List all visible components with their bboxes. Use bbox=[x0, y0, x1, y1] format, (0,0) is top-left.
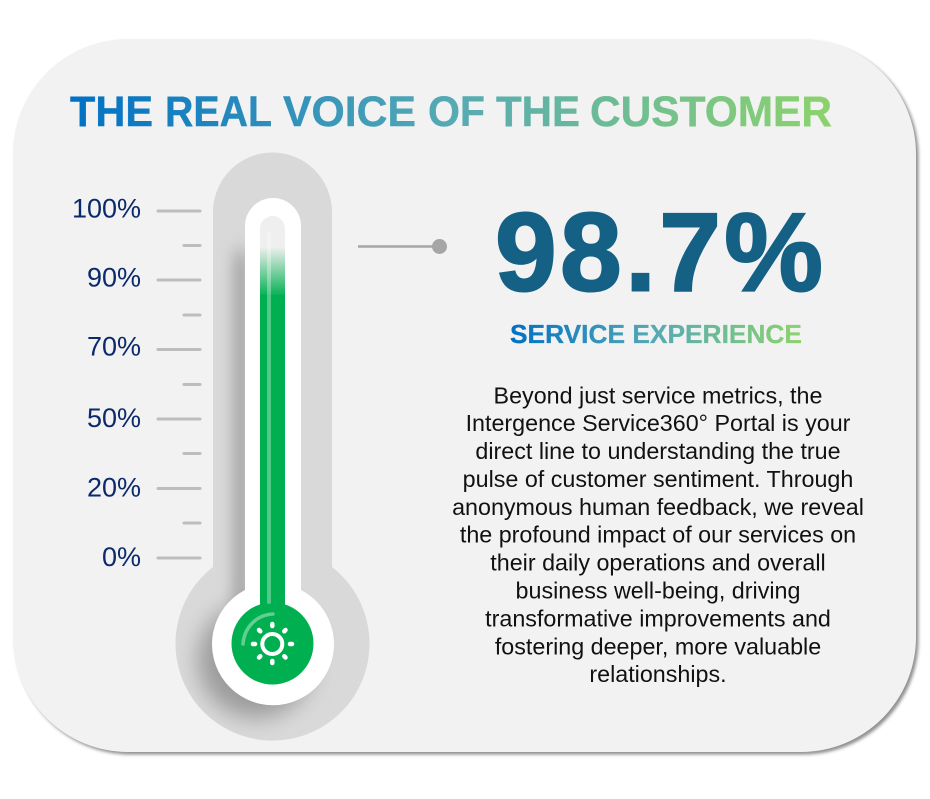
thermometer bbox=[176, 153, 370, 741]
thermometer scale labels: 90% bbox=[87, 262, 141, 292]
title: VOICE bbox=[283, 88, 416, 136]
body text: the profound impact of our services on bbox=[460, 522, 856, 548]
thermometer outer casing bbox=[176, 153, 370, 741]
thermometer scale labels: 20% bbox=[87, 472, 141, 502]
metric label: SERVICE EXPERIENCE bbox=[510, 319, 802, 349]
fading mercury level bbox=[260, 247, 285, 297]
body text: transformative improvements and bbox=[485, 605, 831, 631]
thermometer scale labels: 70% bbox=[87, 332, 141, 362]
pointer line bbox=[358, 239, 447, 254]
big metric value: 98.7% bbox=[495, 190, 823, 314]
bulb highlight bbox=[243, 614, 273, 644]
thermometer scale ticks bbox=[158, 211, 200, 558]
title: THE bbox=[496, 88, 580, 136]
tube highlight bbox=[267, 232, 271, 604]
thermometer scale labels: 100% bbox=[72, 194, 141, 224]
body text: Intergence Service360° Portal is your bbox=[466, 410, 851, 436]
title bbox=[70, 88, 832, 136]
inner shadows bbox=[198, 240, 314, 718]
thermometer scale labels: 0% bbox=[102, 542, 141, 572]
body text: fostering deeper, more valuable bbox=[495, 633, 821, 659]
body text bbox=[452, 382, 864, 687]
body text: their daily operations and overall bbox=[490, 550, 826, 576]
body text: relationships. bbox=[589, 661, 727, 687]
body text: pulse of customer sentiment. Through bbox=[463, 466, 853, 492]
title: CUSTOMER bbox=[590, 88, 832, 136]
thermometer scale labels bbox=[72, 194, 141, 572]
thermometer scale labels: 50% bbox=[87, 403, 141, 433]
body text: anonymous human feedback, we reveal bbox=[452, 494, 864, 520]
title: OF bbox=[428, 88, 485, 136]
solid mercury column bbox=[260, 295, 285, 615]
mercury bulb bbox=[232, 602, 314, 684]
title: THE bbox=[70, 88, 153, 136]
thermometer white glass bbox=[212, 198, 334, 705]
body text: direct line to understanding the true bbox=[475, 438, 841, 464]
body text: business well-being, driving bbox=[516, 578, 800, 604]
icon: sun bbox=[253, 624, 292, 663]
title: REAL bbox=[165, 88, 272, 136]
thermometer empty tube bbox=[260, 216, 285, 306]
body text: Beyond just service metrics, the bbox=[494, 382, 822, 408]
